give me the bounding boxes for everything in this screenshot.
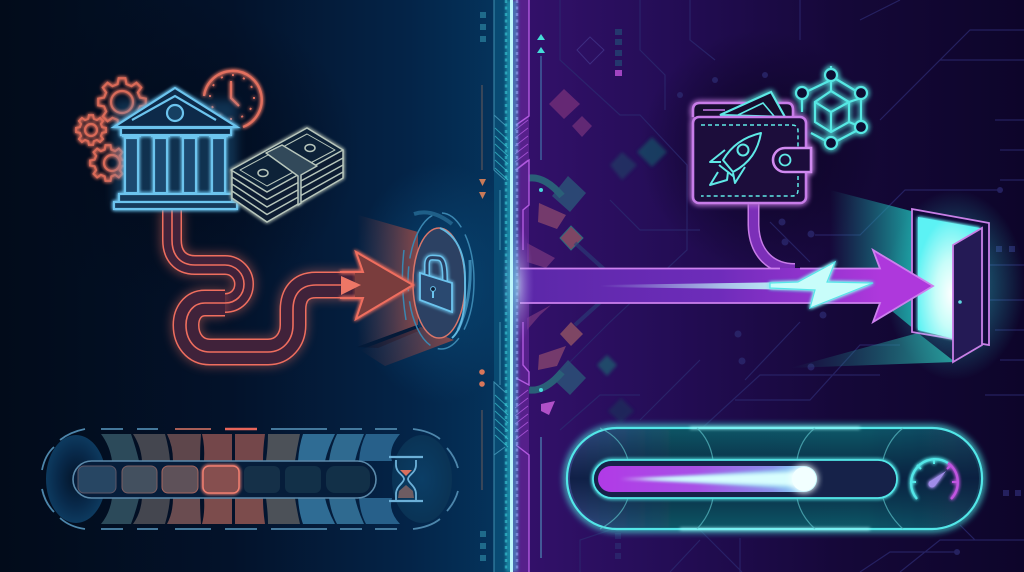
- track outer dashes: [42, 429, 458, 529]
- decorative diamonds on right panel: [527, 37, 667, 423]
- bar container: [593, 460, 897, 498]
- red winding arrow: [172, 210, 413, 352]
- track end caps: [46, 435, 452, 523]
- lightning bolt: [770, 262, 873, 308]
- circuit traces on right panel: [560, 0, 1024, 572]
- arrow edges: [520, 250, 933, 322]
- panel: right purple background: [512, 0, 1024, 572]
- inner arrow: [341, 276, 361, 295]
- icon: gears: [76, 78, 146, 181]
- squares strip top right: [615, 29, 622, 76]
- icon: blockchain cube network: [796, 66, 867, 149]
- door light: [918, 217, 980, 345]
- bar container: [73, 461, 376, 498]
- icon: padlock: [420, 258, 452, 312]
- icon: hourglass: [389, 457, 423, 501]
- lock door: [402, 212, 474, 349]
- icon: money stack: [231, 128, 343, 222]
- left signal column bottom with dots: [479, 369, 486, 561]
- icon: open door frame and light: [912, 209, 989, 345]
- icon: speedometer: [910, 458, 958, 499]
- door knob: [958, 300, 962, 304]
- pediment: [114, 88, 237, 127]
- pill inner shading: [570, 431, 979, 526]
- connector from wallet: [754, 203, 795, 269]
- wallet back: [693, 103, 793, 120]
- central glow line: [502, 0, 534, 572]
- purple fill: [598, 466, 817, 492]
- progress track: segmented slow bar: [42, 429, 458, 529]
- left lock door beam: [357, 215, 454, 366]
- door panel: [953, 228, 982, 362]
- left signal column top with triangles: [479, 12, 486, 199]
- clasp: [773, 148, 811, 172]
- arrowhead: [340, 252, 413, 319]
- entablature: [121, 128, 231, 135]
- columns: [122, 136, 228, 193]
- panel: left dark blue background: [0, 0, 530, 572]
- pill body: [567, 428, 982, 529]
- divider left strip: [494, 0, 511, 572]
- icon: rocket: [710, 133, 761, 185]
- icon: bank building: [114, 88, 237, 209]
- path band first half: [172, 210, 244, 303]
- path band second half: [186, 285, 363, 352]
- pill segment arcs: [600, 428, 903, 529]
- icon: wallet: [693, 92, 811, 203]
- cash: [720, 92, 785, 117]
- wallet body: [693, 117, 806, 203]
- icon: clock: [204, 71, 262, 127]
- path center line: [172, 210, 350, 352]
- streak and lightning bolt: [600, 262, 873, 308]
- pill glowing highlights: [680, 428, 870, 529]
- stitching: [701, 125, 798, 196]
- light beam from door over arrow: [790, 190, 1024, 380]
- lock door panel: [413, 228, 465, 338]
- lock outer rings: [402, 212, 474, 349]
- shaft and head: [520, 250, 933, 322]
- door frame: [912, 209, 989, 345]
- track curved segments: [101, 434, 400, 524]
- bar cells: [78, 466, 370, 493]
- right signal lines with up arrows: [537, 34, 545, 558]
- comet head: [792, 467, 816, 491]
- fast progress pill: [567, 428, 982, 529]
- comet outer streak: [640, 469, 808, 489]
- divider right strip: [512, 0, 529, 572]
- steps: [119, 194, 232, 202]
- purple speed arrow: [520, 203, 933, 322]
- central divider: [494, 0, 529, 572]
- comet core streak: [620, 472, 812, 486]
